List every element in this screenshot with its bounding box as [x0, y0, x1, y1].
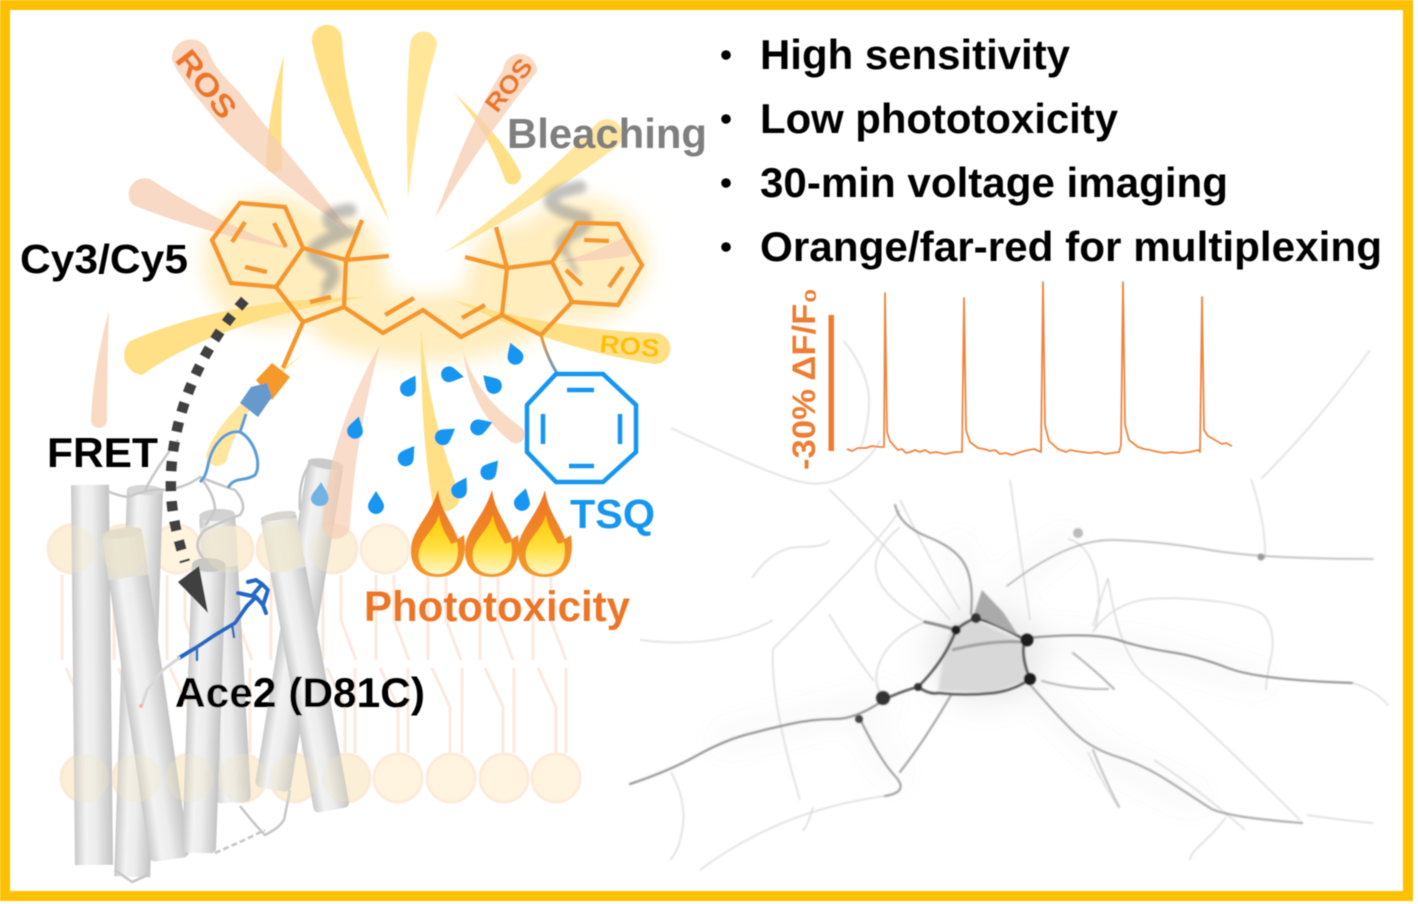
label: TSQ: TSQ: [570, 491, 655, 537]
label: Ace2 (D81C): Ace2 (D81C): [175, 669, 425, 716]
label: ROS rays: ROS: [480, 53, 539, 118]
peach ray over helix: [322, 345, 380, 539]
dashed FRET arrow: [171, 300, 245, 613]
helix 7: [255, 456, 344, 793]
scale bar label: -30% ΔF/F₀: [786, 288, 822, 470]
label: FRET: FRET: [47, 429, 158, 476]
water drops: [345, 340, 534, 514]
glow around cyanine dye: [204, 196, 648, 361]
TSQ linker: [541, 335, 557, 373]
voltage spike trace: [847, 282, 1232, 455]
feature bullet list: High sensitivity: [760, 31, 1071, 78]
helix 1: [71, 485, 113, 865]
loops: [105, 440, 310, 882]
icon: water drop in helix: [311, 482, 329, 506]
feature bullet list: Orange/far-red for multiplexing: [760, 223, 1382, 270]
lipid heads: [48, 525, 580, 802]
neuron fluorescence image: [630, 341, 1388, 870]
icon: flames: [411, 490, 572, 577]
helix 4: [199, 508, 251, 804]
feature bullet list: [721, 31, 1382, 270]
label: Bleaching: Bleaching: [507, 110, 707, 157]
label: ROS rays: [168, 43, 661, 363]
feature bullet list: Low phototoxicity: [760, 95, 1119, 142]
flame 2: [465, 490, 519, 577]
flame 3: [518, 490, 572, 577]
helix 3: [101, 525, 190, 862]
protein transmembrane helices: [48, 440, 370, 882]
helix 6: [260, 509, 350, 813]
label: ROS rays: ROS: [168, 43, 244, 126]
neuron soma: [938, 620, 1030, 693]
membrane heads seen through helices: [48, 525, 370, 802]
ligand stick model: [139, 580, 268, 708]
linker tag and blue loop: [200, 363, 290, 488]
cyanine dye molecule: [212, 203, 642, 368]
voltage trace scale bar: [828, 315, 834, 451]
main dendrites: [630, 505, 1388, 823]
smoke wisps: [313, 187, 586, 300]
helix 5: [182, 557, 226, 853]
label: Cy3/Cy5: Cy3/Cy5: [20, 236, 188, 282]
lipid bilayer: [48, 525, 580, 802]
lipid tails: [62, 575, 566, 753]
soma edge and dark puncta: [855, 528, 1264, 723]
flame 1: [411, 490, 465, 577]
yellow and peach light rays: [91, 25, 670, 511]
faint neurites: [640, 341, 1373, 870]
TSQ cyclooctatetraene ring: [527, 374, 636, 482]
helix 2: [114, 484, 163, 877]
feature bullet list: 30-min voltage imaging: [760, 159, 1228, 206]
label: Phototoxicity: Phototoxicity: [364, 583, 630, 631]
label: ROS rays: ROS: [598, 330, 661, 363]
